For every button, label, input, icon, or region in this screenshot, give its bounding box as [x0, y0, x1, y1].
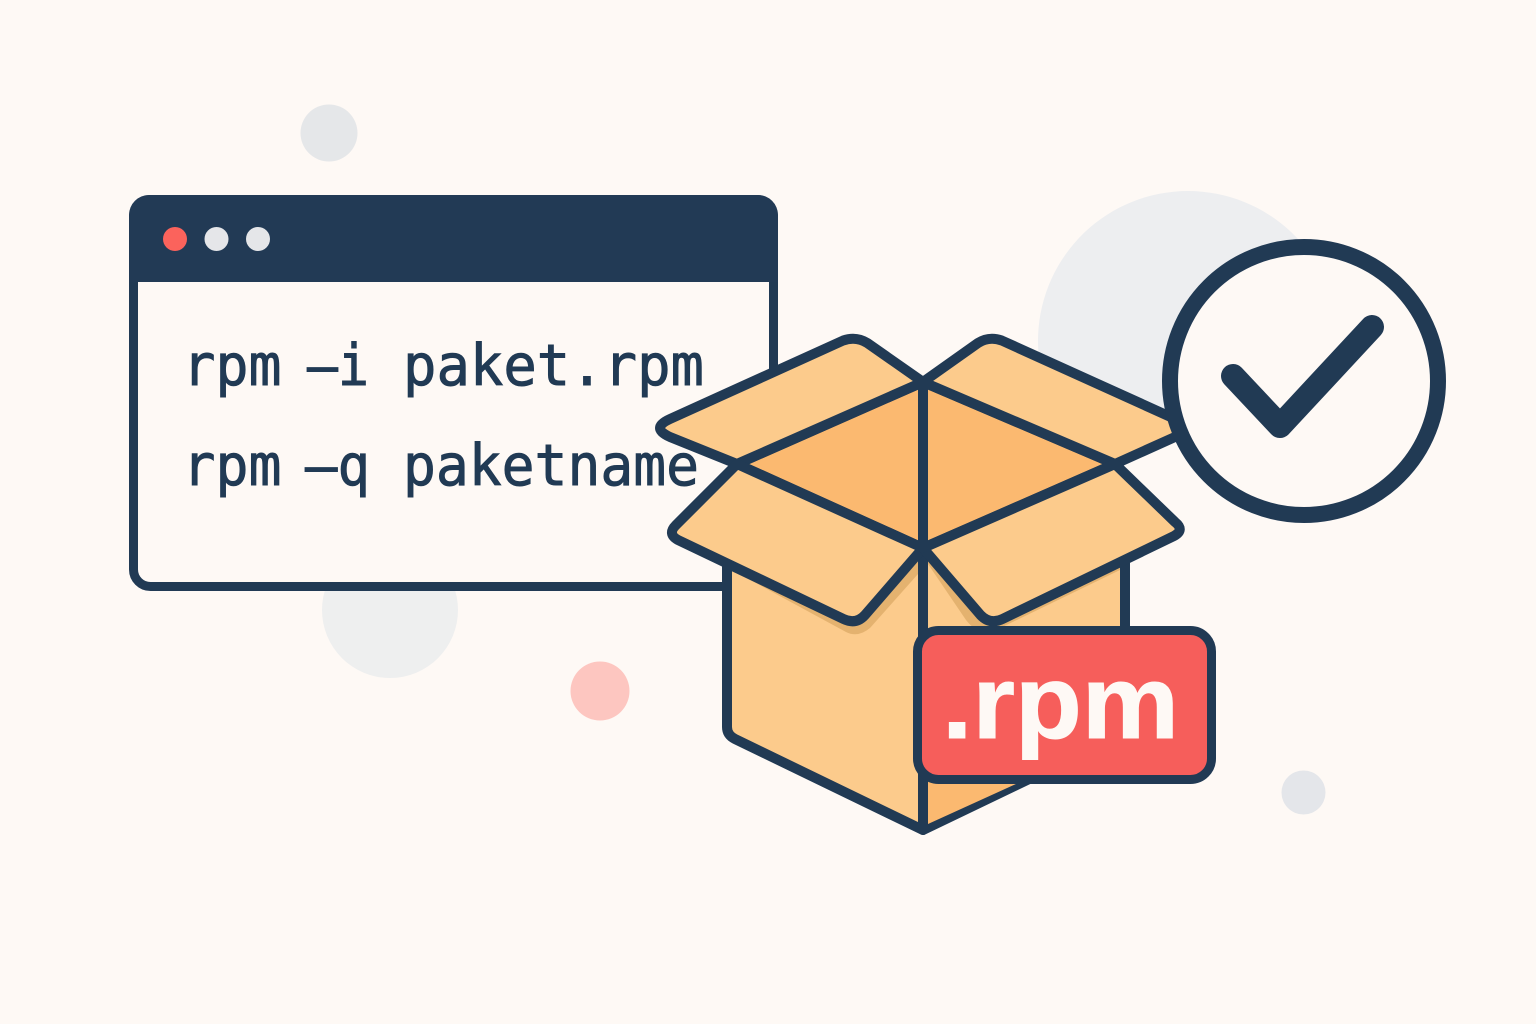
command text: rpm -i: paket.rpm [403, 333, 704, 399]
icon: grey window dot [204, 227, 228, 251]
front left flap [672, 464, 923, 621]
icon: checkmark in circle [1170, 247, 1438, 515]
icon: grey window dot [246, 227, 270, 251]
badge: .rpm label [918, 630, 1212, 780]
command text: rpm -q [182, 433, 699, 499]
box inner opening [737, 382, 1115, 548]
check mark [1233, 327, 1372, 426]
terminal body [134, 200, 774, 586]
command text: rpm -i [182, 333, 704, 399]
command text: rpm -i: rpm [182, 333, 282, 399]
check circle ring [1170, 247, 1438, 515]
badge text: .rpm [942, 645, 1179, 761]
box right face lower dark [928, 770, 1040, 824]
decorative circle: large grey behind checkmark [1038, 191, 1338, 440]
decorative circle: pink [570, 662, 630, 720]
icon: open cardboard box [660, 339, 1195, 830]
command text: rpm -q: rpm [182, 433, 282, 499]
command text: rpm -i: –i [307, 333, 369, 399]
decorative circle: grey below terminal [322, 542, 458, 678]
back right flap [923, 339, 1195, 464]
front right flap [923, 464, 1180, 621]
command text: rpm -q: –q [305, 433, 370, 499]
decorative circle: top left grey [300, 104, 358, 162]
decorative circle: small grey bottom right [1282, 770, 1326, 814]
panel: terminal window [129, 195, 778, 586]
box right face upper [923, 545, 1125, 830]
command text: rpm -q: paketname [403, 433, 699, 499]
flap shadows [732, 552, 1120, 634]
box center seam [918, 382, 928, 548]
box left face [727, 545, 923, 830]
back left flap [660, 339, 923, 464]
terminal title bar [129, 195, 778, 282]
badge background [918, 630, 1212, 780]
icon: red window dot [163, 227, 187, 251]
